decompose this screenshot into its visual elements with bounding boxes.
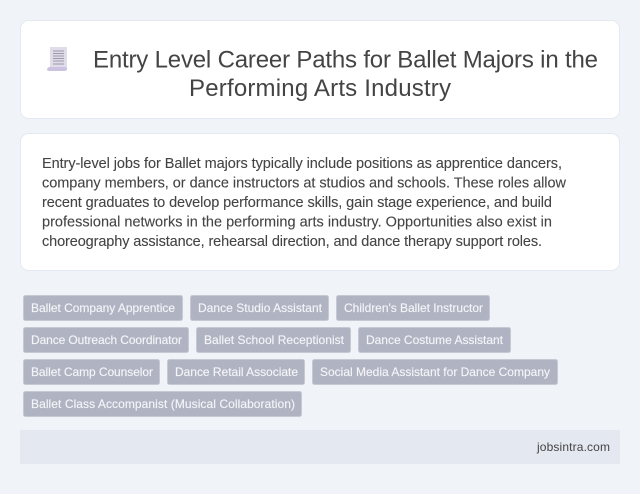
tag list [24,296,558,416]
tag [24,296,182,320]
tag [336,296,490,320]
tag [190,296,328,320]
text block: description: company members, or dance instructors at studios and schools. These roles allow [42,176,567,192]
tag: Ballet Class Accompanist (Musical Collaboration) [31,397,295,411]
tag [312,360,558,384]
icon: document scroll [47,47,67,71]
text block: description [42,156,567,250]
title: Entry Level Career Paths for Ballet Majors in the [93,46,598,74]
tag [24,360,160,384]
tag [358,328,510,352]
footer [20,430,620,464]
tag: Dance Retail Associate [175,365,298,379]
text block: description: recent graduates to develop performance skills, gain stage experience, and build [42,195,552,211]
tag: Children's Ballet Instructor [344,301,483,315]
panel: description [20,134,620,270]
tag: Ballet Company Apprentice [31,301,175,315]
text block: description: choreography assistance, rehearsal direction, and dance therapy support roles. [42,234,542,250]
tag [196,328,350,352]
tag: Dance Outreach Coordinator [31,333,182,347]
panel: title card [20,20,620,118]
text block: description: professional networks in the performing arts industry. Opportunities also exist in [42,214,552,230]
footer source text: jobsintra.com [536,440,610,454]
tag [24,392,302,416]
tag: Social Media Assistant for Dance Company [320,365,550,379]
tag: Ballet Camp Counselor [31,365,153,379]
tag: Dance Studio Assistant [198,301,323,315]
tag [24,328,188,352]
title: Performing Arts Industry [189,75,451,102]
title [93,46,598,102]
text block: description: Entry-level jobs for Ballet majors typically include positions as apprentice dancers, [42,156,562,172]
tag [168,360,304,384]
tag: Dance Costume Assistant [366,333,504,347]
tag: Ballet School Receptionist [204,333,345,347]
